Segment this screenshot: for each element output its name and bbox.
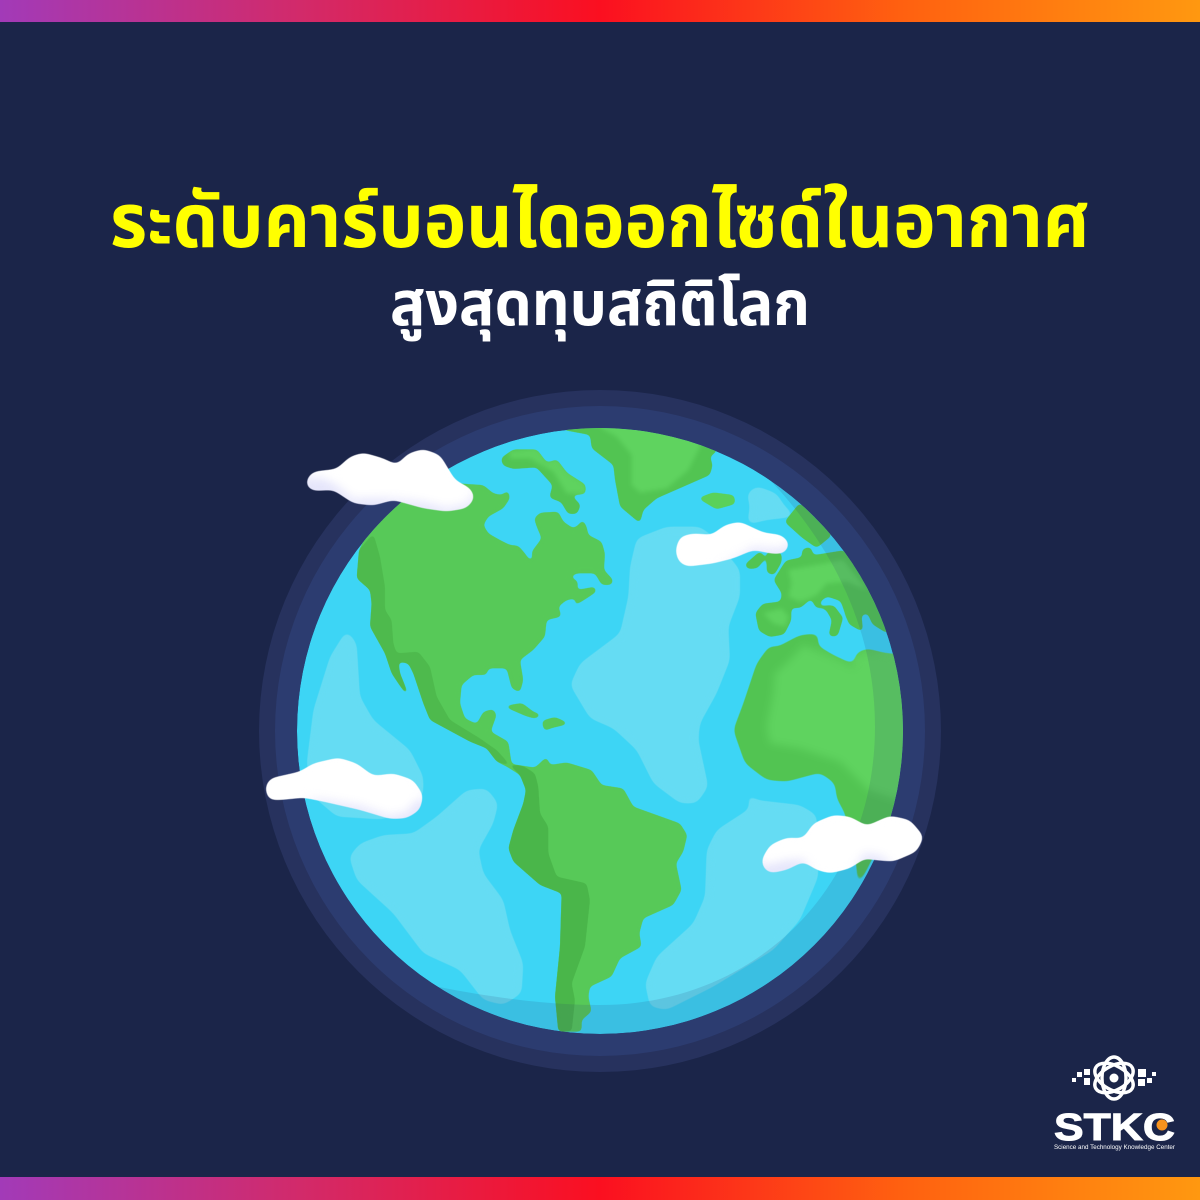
africa — [734, 634, 903, 879]
logo atom icon — [1090, 1057, 1138, 1099]
greenland — [566, 428, 716, 521]
title: ระดับคาร์บอนไดออกไซด์ในอากาศ — [110, 179, 1090, 264]
light ocean currents — [307, 486, 818, 1010]
subtitle: สูงสุดทุบสถิติโลก — [390, 270, 810, 342]
europe — [757, 548, 900, 636]
logo tagline: Science and Technology Knowledge Center — [1054, 1145, 1175, 1151]
americas west shading — [357, 533, 590, 1032]
cloud: top right — [675, 522, 790, 567]
caribbean and arctic islands — [502, 450, 585, 729]
logo wordmark: STKC — [1054, 1107, 1175, 1149]
logo orange dot — [1156, 1120, 1168, 1130]
ocean — [297, 428, 903, 1034]
atmosphere inner ring — [275, 406, 925, 1056]
globe shadow crescent — [438, 482, 903, 1034]
cloud: top left — [306, 449, 475, 512]
cloud: left — [265, 758, 423, 819]
iceland, britain, scandinavia — [700, 493, 830, 573]
atmosphere outer ring — [259, 390, 941, 1072]
bottom gradient bar — [0, 1177, 1200, 1200]
logo pixel squares — [1072, 1069, 1156, 1086]
americas — [357, 477, 687, 1032]
cloud: bottom right — [761, 815, 924, 873]
logo: STKC — [1054, 1057, 1175, 1151]
top gradient bar — [0, 0, 1200, 22]
earth globe — [265, 403, 930, 1060]
